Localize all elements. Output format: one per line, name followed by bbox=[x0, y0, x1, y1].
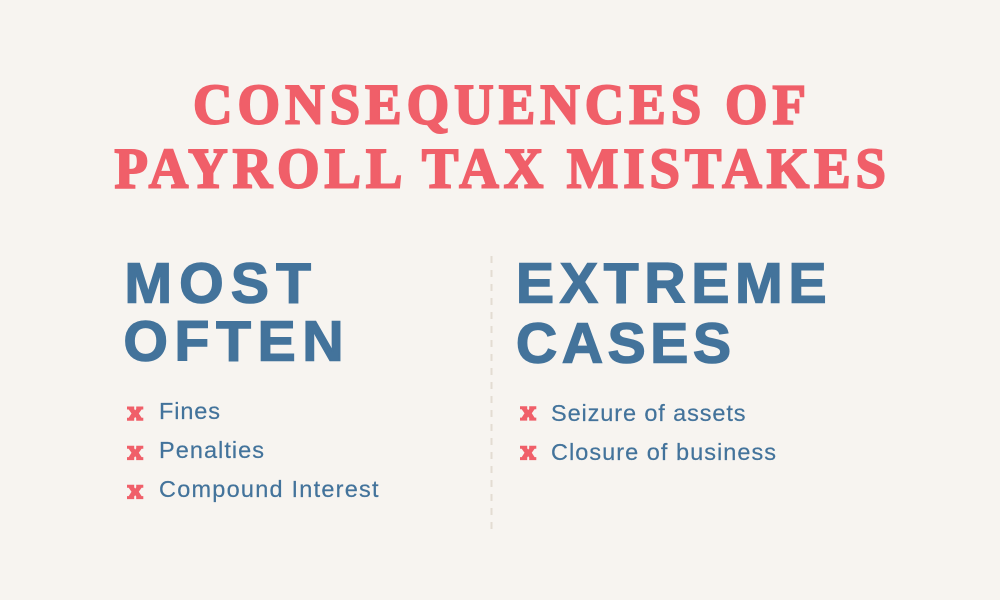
title: CONSEQUENCES OF bbox=[193, 74, 806, 137]
icon: x mark bbox=[127, 446, 143, 460]
list: extreme cases items bbox=[520, 400, 776, 465]
heading: extreme cases bbox=[516, 252, 826, 376]
panel: most often bbox=[124, 252, 379, 502]
heading: most often: MOST bbox=[124, 252, 311, 316]
list: most often items bbox=[127, 398, 379, 502]
item: closure of business: Closure of business bbox=[551, 439, 776, 465]
icon: x mark bbox=[127, 406, 143, 421]
heading: most often: OFTEN bbox=[124, 310, 344, 374]
heading: extreme cases: EXTREME bbox=[516, 252, 826, 316]
heading: most often bbox=[124, 252, 344, 374]
item: fines: Fines bbox=[159, 398, 220, 424]
icon: x mark bbox=[520, 406, 536, 421]
heading: extreme cases: CASES bbox=[516, 312, 731, 376]
icon: x mark bbox=[520, 446, 536, 460]
item: compound interest: Compound Interest bbox=[159, 476, 379, 502]
item: seizure of assets: Seizure of assets bbox=[551, 400, 746, 426]
item: penalties: Penalties bbox=[159, 437, 264, 463]
panel: extreme cases bbox=[516, 252, 826, 465]
title: PAYROLL TAX MISTAKES bbox=[114, 138, 886, 201]
title bbox=[114, 74, 886, 201]
icon: x mark bbox=[127, 485, 143, 499]
